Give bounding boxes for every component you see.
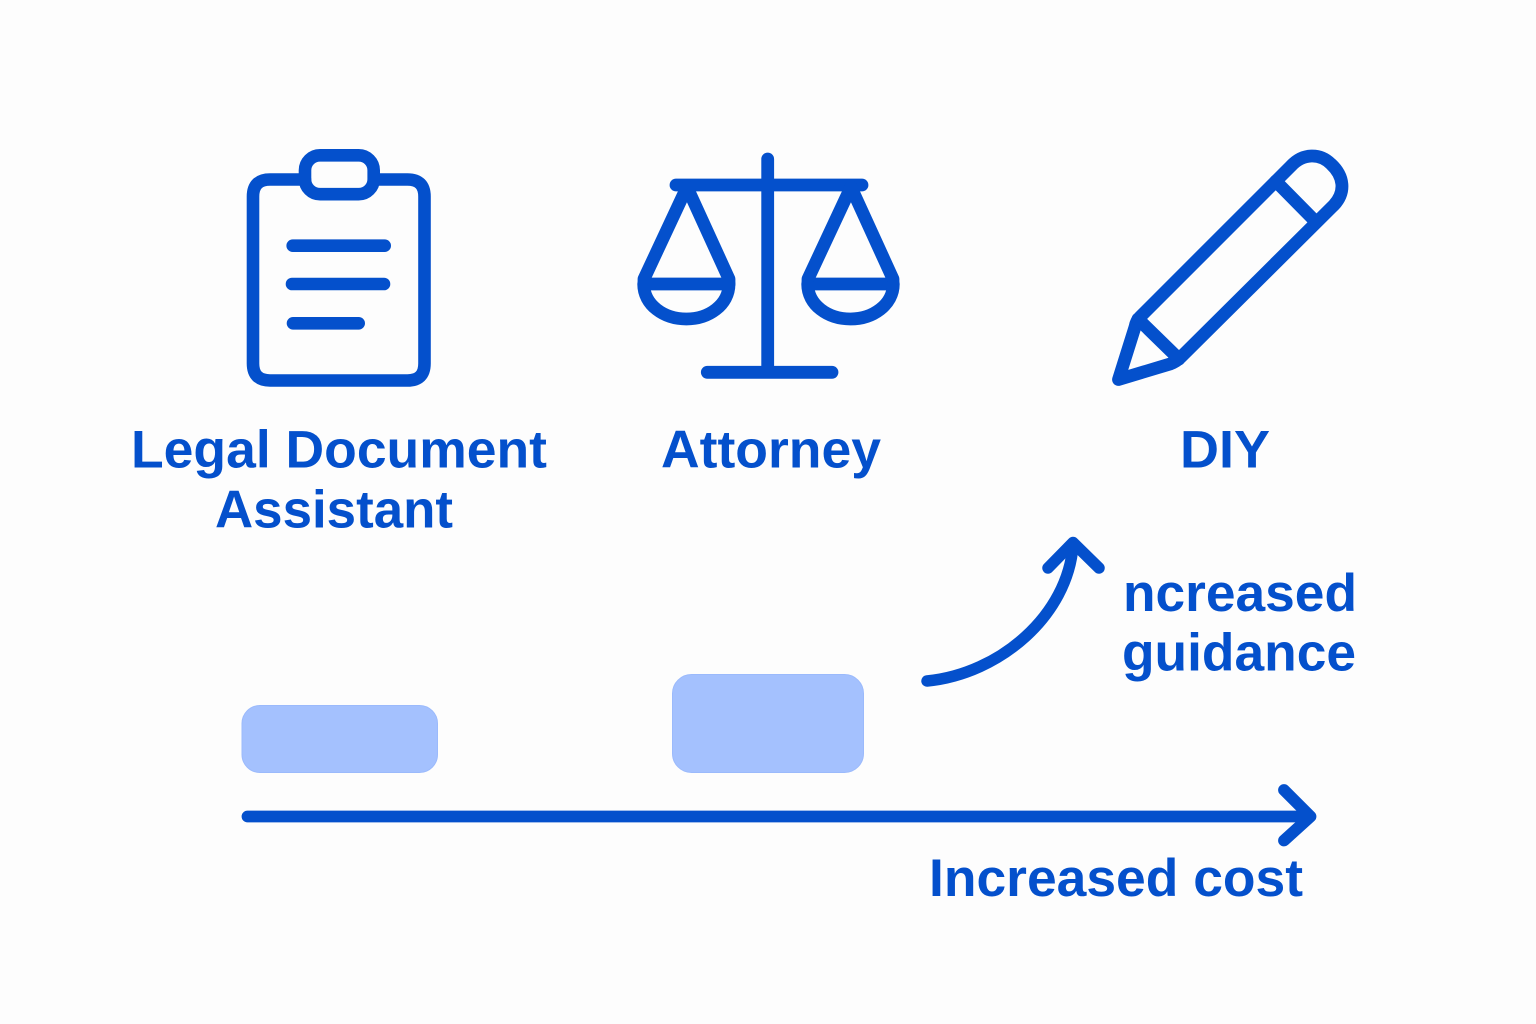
label: Attorney: Attorney: [661, 420, 882, 480]
arrow: cost axis: [248, 790, 1310, 840]
label: DIY: DIY: [1180, 420, 1270, 480]
bar: legal document assistant cost: [242, 706, 438, 772]
label: Assistant: Assistant: [215, 480, 453, 540]
label: increased cost: Increased cost: [929, 849, 1303, 908]
icon: clipboard: [253, 155, 424, 380]
label: ncreased: ncreased: [1123, 564, 1357, 623]
icon: pencil: [1118, 156, 1342, 380]
icon: scales: [644, 159, 893, 372]
bar: attorney cost: [672, 674, 864, 772]
arrow: curved guidance: [927, 542, 1099, 681]
label: guidance: guidance: [1122, 624, 1356, 682]
label: Legal Document: Legal Document: [131, 420, 547, 480]
